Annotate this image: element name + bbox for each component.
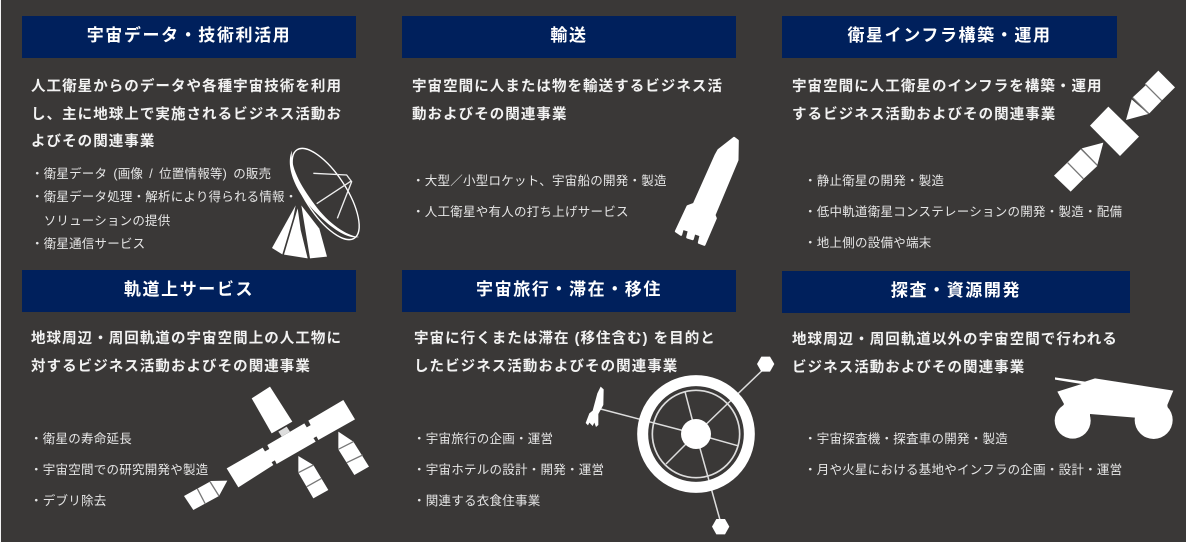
description text: 地球周辺・周回軌道以外の宇宙空間で行われる — [792, 332, 1118, 348]
bullet list: ソリューションの提供 — [44, 214, 170, 228]
heading: 宇宙旅行・滞在・移住: 宇宙旅行・滞在・移住 — [476, 280, 662, 299]
bullet list: ・関連する衣食住事業 — [413, 494, 541, 508]
icon: satellite dish — [272, 148, 360, 258]
panel: 宇宙データ・技術利活用 — [22, 16, 356, 251]
bullet list: ・衛星通信サービス — [31, 237, 145, 251]
description text — [792, 331, 1118, 376]
icon: rocket — [674, 136, 739, 246]
description text: 対するビジネス活動およびその関連事業 — [31, 359, 311, 375]
heading: 軌道上サービス: 軌道上サービス — [124, 280, 254, 299]
icon: rover — [1054, 377, 1174, 439]
description text — [414, 330, 716, 375]
description text: し、主に地球上で実施されるビジネス活動お — [31, 107, 342, 123]
panel: 宇宙旅行・滞在・移住 — [402, 270, 736, 508]
bullet list — [412, 174, 667, 219]
bullet list — [31, 167, 297, 251]
description text: 地球周辺・周回軌道の宇宙空間上の人工物に — [31, 331, 342, 347]
description text — [31, 78, 342, 150]
bullet list: ・宇宙探査機・探査車の開発・製造 — [804, 432, 1008, 446]
description text: よびその関連事業 — [31, 134, 155, 150]
bullet list: ・宇宙空間での研究開発や製造 — [30, 463, 209, 477]
heading: 宇宙データ・技術利活用: 宇宙データ・技術利活用 — [87, 26, 291, 45]
heading: 宇宙データ・技術利活用 — [22, 16, 356, 58]
bullet list — [804, 174, 1122, 250]
heading: 探査・資源開発: 探査・資源開発 — [891, 281, 1021, 300]
bullet list: ・月や火星における基地やインフラの企画・設計・運営 — [804, 463, 1122, 477]
bullet list: ・大型／小型ロケット、宇宙船の開発・製造 — [412, 174, 667, 188]
bullet list: ・地上側の設備や端末 — [804, 236, 932, 250]
icon: space hotel wheel — [586, 356, 774, 534]
bullet list: ・宇宙旅行の企画・運営 — [413, 432, 553, 446]
description text: 人工衛星からのデータや各種宇宙技術を利用 — [31, 79, 342, 95]
description text: 宇宙空間に人工衛星のインフラを構築・運用 — [792, 79, 1103, 95]
icon: space station — [184, 386, 369, 510]
panel: 探査・資源開発 — [782, 271, 1130, 477]
description text — [412, 78, 723, 123]
heading: 軌道上サービス — [22, 270, 356, 312]
bullet list: ・人工衛星や有人の打ち上げサービス — [412, 205, 629, 219]
panel: 輸送 — [402, 16, 736, 219]
panel: 軌道上サービス — [22, 270, 356, 508]
bullet list: ・衛星データ処理・解析により得られる情報・ — [31, 190, 297, 204]
bullet list: ・衛星の寿命延長 — [30, 432, 132, 446]
description text: 宇宙空間に人または物を輸送するビジネス活 — [412, 79, 723, 95]
description text — [792, 78, 1103, 123]
bullet list: ・衛星データ (画像 / 位置情報等) の販売 — [31, 167, 271, 181]
bullet list: ・宇宙ホテルの設計・開発・運営 — [413, 463, 604, 477]
icon: satellite — [1054, 70, 1175, 192]
bullet list: ・デブリ除去 — [30, 494, 107, 508]
heading: 衛星インフラ構築・運用 — [782, 16, 1117, 58]
description text: するビジネス活動およびその関連事業 — [792, 107, 1056, 123]
heading: 宇宙旅行・滞在・移住 — [402, 270, 736, 312]
bullet list — [804, 432, 1122, 477]
bullet list — [30, 432, 209, 508]
description text: 宇宙に行くまたは滞在 (移住含む) を目的と — [414, 331, 716, 347]
description text: ビジネス活動およびその関連事業 — [792, 360, 1025, 376]
heading: 衛星インフラ構築・運用: 衛星インフラ構築・運用 — [847, 26, 1052, 45]
heading: 探査・資源開発 — [782, 271, 1130, 313]
heading: 輸送 — [402, 16, 736, 58]
description text: したビジネス活動およびその関連事業 — [414, 359, 678, 375]
panel: 衛星インフラ構築・運用 — [782, 16, 1122, 250]
description text: 動およびその関連事業 — [412, 107, 568, 123]
description text — [31, 330, 342, 375]
bullet list: ・静止衛星の開発・製造 — [804, 174, 944, 188]
heading: 輸送: 輸送 — [550, 26, 588, 45]
bullet list: ・低中軌道衛星コンステレーションの開発・製造・配備 — [804, 205, 1122, 219]
bullet list — [413, 432, 604, 508]
